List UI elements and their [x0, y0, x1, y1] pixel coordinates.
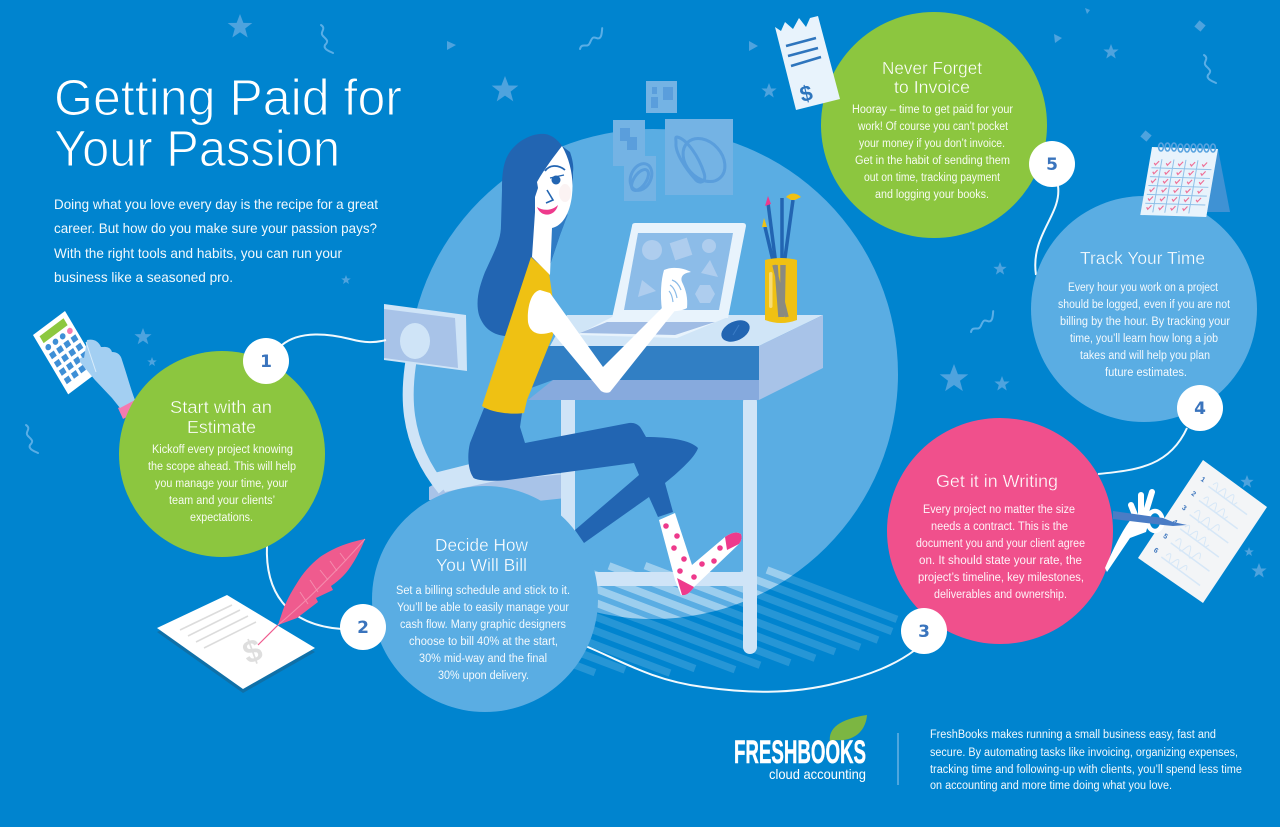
- face and neck: [532, 146, 573, 275]
- icon: signed list and hand: [1105, 460, 1267, 603]
- circle: [821, 12, 1047, 238]
- company description: FreshBooks makes running a small business easy, fast and: [930, 729, 1216, 741]
- dollar sign: $: [238, 631, 267, 671]
- company description: secure. By automating tasks like invoicing, organizing expenses,: [930, 747, 1238, 759]
- icon: calculator and hand: [33, 311, 140, 419]
- calculator: [33, 311, 100, 394]
- body: Every hour you work on a project: [1068, 282, 1219, 294]
- paper: [157, 595, 315, 689]
- circle: [887, 418, 1113, 644]
- mouse: [718, 316, 753, 346]
- body: takes and will help you plan: [1080, 350, 1210, 362]
- desk body: [528, 380, 759, 400]
- body: you manage your time, your: [155, 478, 288, 490]
- laptop: [577, 223, 746, 338]
- body: Every project no matter the size: [923, 504, 1075, 516]
- chair seat: [429, 464, 566, 505]
- icon: signed list and hand: 5: [1162, 533, 1169, 541]
- icon: signed list and hand: 2: [1190, 490, 1197, 499]
- heading: [882, 58, 982, 97]
- icon: signed list and hand: 4: [1171, 519, 1178, 527]
- body: time, you’ll learn how long a job: [1070, 333, 1218, 345]
- title: Getting Paid for: [54, 69, 402, 126]
- step 4: track time: [1031, 196, 1257, 422]
- body: Hooray – time to get paid for your: [852, 104, 1013, 116]
- body: 30% upon delivery.: [438, 670, 529, 682]
- body: should be logged, even if you are not: [1058, 299, 1231, 311]
- wordmark: FRESHBOOKS: [734, 734, 866, 770]
- brushes: [765, 198, 793, 265]
- hair behind neck: [550, 214, 568, 265]
- writing hand: [1105, 492, 1162, 572]
- heading: [170, 397, 272, 437]
- paper shadow: [157, 599, 315, 693]
- heading: to Invoice: [894, 77, 970, 97]
- chair stem: [408, 350, 443, 490]
- logo: [734, 715, 867, 782]
- number badge 4: 4: [1194, 399, 1206, 419]
- intro text: career. But how do you make sure your passion pays?: [54, 220, 377, 236]
- step 2: billing: [372, 486, 598, 712]
- step 1: estimate: [119, 351, 325, 557]
- body: [916, 504, 1085, 601]
- title: Your Passion: [54, 120, 340, 177]
- hand: [80, 340, 135, 408]
- icon: signed list and hand: 1: [1199, 476, 1206, 484]
- icon: signed list and hand: 3: [1180, 504, 1187, 513]
- laptop base: [577, 317, 728, 338]
- body: deliverables and ownership.: [934, 589, 1067, 601]
- hair: [478, 134, 573, 336]
- body: [852, 104, 1013, 201]
- decorative stars and squiggles: [26, 8, 1267, 577]
- intro text: [54, 196, 378, 285]
- floor stripes: [570, 566, 897, 673]
- company description: [930, 729, 1242, 792]
- heading: [435, 535, 528, 575]
- number badge 2: 2: [357, 618, 369, 638]
- icon: signed list and hand: 6: [1152, 547, 1159, 555]
- icon: calendar: [1140, 143, 1230, 217]
- body: project’s timeline, key milestones,: [918, 572, 1084, 584]
- number badge 1: 1: [260, 352, 272, 372]
- connector lines: [267, 186, 1187, 692]
- icon: quill and contract: [157, 539, 365, 693]
- intro text: business like a seasoned pro.: [54, 269, 233, 285]
- body: Get in the habit of sending them: [855, 155, 1010, 167]
- step 3: contract: [887, 418, 1113, 644]
- shirt: [482, 257, 553, 414]
- intro text: Doing what you love every day is the recipe for a great: [54, 196, 378, 212]
- circle: [372, 486, 598, 712]
- desk: [520, 315, 823, 654]
- heading: Start with an: [170, 397, 272, 417]
- number badge 5: [1029, 141, 1075, 187]
- pen: [1113, 511, 1187, 526]
- heading: Estimate: [187, 417, 256, 437]
- leaf: [827, 715, 867, 750]
- body: future estimates.: [1105, 367, 1187, 379]
- body: and logging your books.: [875, 189, 989, 201]
- central backdrop circle: [408, 129, 898, 619]
- chair back: [384, 304, 467, 371]
- heading: Decide How: [435, 535, 528, 555]
- desk legs: [560, 395, 757, 654]
- number badge 3: [901, 608, 947, 654]
- body: needs a contract. This is the: [931, 521, 1068, 533]
- body: cash flow. Many graphic designers: [400, 619, 566, 631]
- number badge 2: [340, 604, 386, 650]
- body: You’ll be able to easily manage your: [397, 602, 569, 614]
- jeans: [468, 408, 698, 543]
- body: Kickoff every project knowing: [152, 444, 293, 456]
- facial features: [537, 166, 571, 215]
- intro text: With the right tools and habits, you can run your: [54, 245, 342, 261]
- company description: on accounting and more time doing what you love.: [930, 780, 1172, 792]
- body: choose to bill 40% at the start,: [409, 636, 558, 648]
- circle: [119, 351, 325, 557]
- body: document you and your client agree: [916, 538, 1085, 550]
- number badge 4: [1177, 385, 1223, 431]
- body: [396, 585, 570, 682]
- body: expectations.: [190, 512, 253, 524]
- cup: [765, 258, 797, 323]
- heading: You Will Bill: [436, 555, 527, 575]
- artwork sheets on the wall: [613, 81, 733, 201]
- body: [1058, 282, 1231, 379]
- body: the scope ahead. This will help: [148, 461, 296, 473]
- hand: [661, 268, 691, 311]
- cuff: [118, 399, 140, 419]
- icon: receipt: $: [797, 80, 815, 107]
- quill: [278, 539, 365, 625]
- number badge 3: 3: [918, 622, 930, 642]
- body: out on time, tracking payment: [864, 172, 1001, 184]
- body: billing by the hour. By tracking your: [1060, 316, 1230, 328]
- body: team and your clients’: [169, 495, 275, 507]
- title: [54, 69, 402, 177]
- heading: Never Forget: [882, 58, 982, 78]
- company description: tracking time and following-up with clients, you’ll spend less time: [930, 764, 1242, 776]
- chair: [384, 304, 566, 505]
- sock: [659, 513, 742, 595]
- tagline: cloud accounting: [769, 766, 866, 782]
- circle: [1031, 196, 1257, 422]
- heading: Get it in Writing: [936, 471, 1058, 491]
- body: your money if you don’t invoice.: [859, 138, 1005, 150]
- step 5: invoice: [821, 12, 1047, 238]
- woman: [468, 134, 742, 595]
- body: Set a billing schedule and stick to it.: [396, 585, 570, 597]
- icon: receipt: [775, 16, 840, 110]
- arm: [528, 290, 677, 393]
- divider: [898, 733, 899, 785]
- pencil cup with brushes: [762, 194, 801, 323]
- body: 30% mid-way and the final: [419, 653, 547, 665]
- list paper: [1138, 460, 1267, 603]
- number badge 5: 5: [1046, 155, 1058, 175]
- number badge 1: [243, 338, 289, 384]
- heading: Track Your Time: [1080, 248, 1205, 268]
- body: work! Of course you can’t pocket: [857, 121, 1009, 133]
- laptop screen: [612, 223, 746, 318]
- body: on. It should state your rate, the: [919, 555, 1082, 567]
- body: [148, 444, 296, 524]
